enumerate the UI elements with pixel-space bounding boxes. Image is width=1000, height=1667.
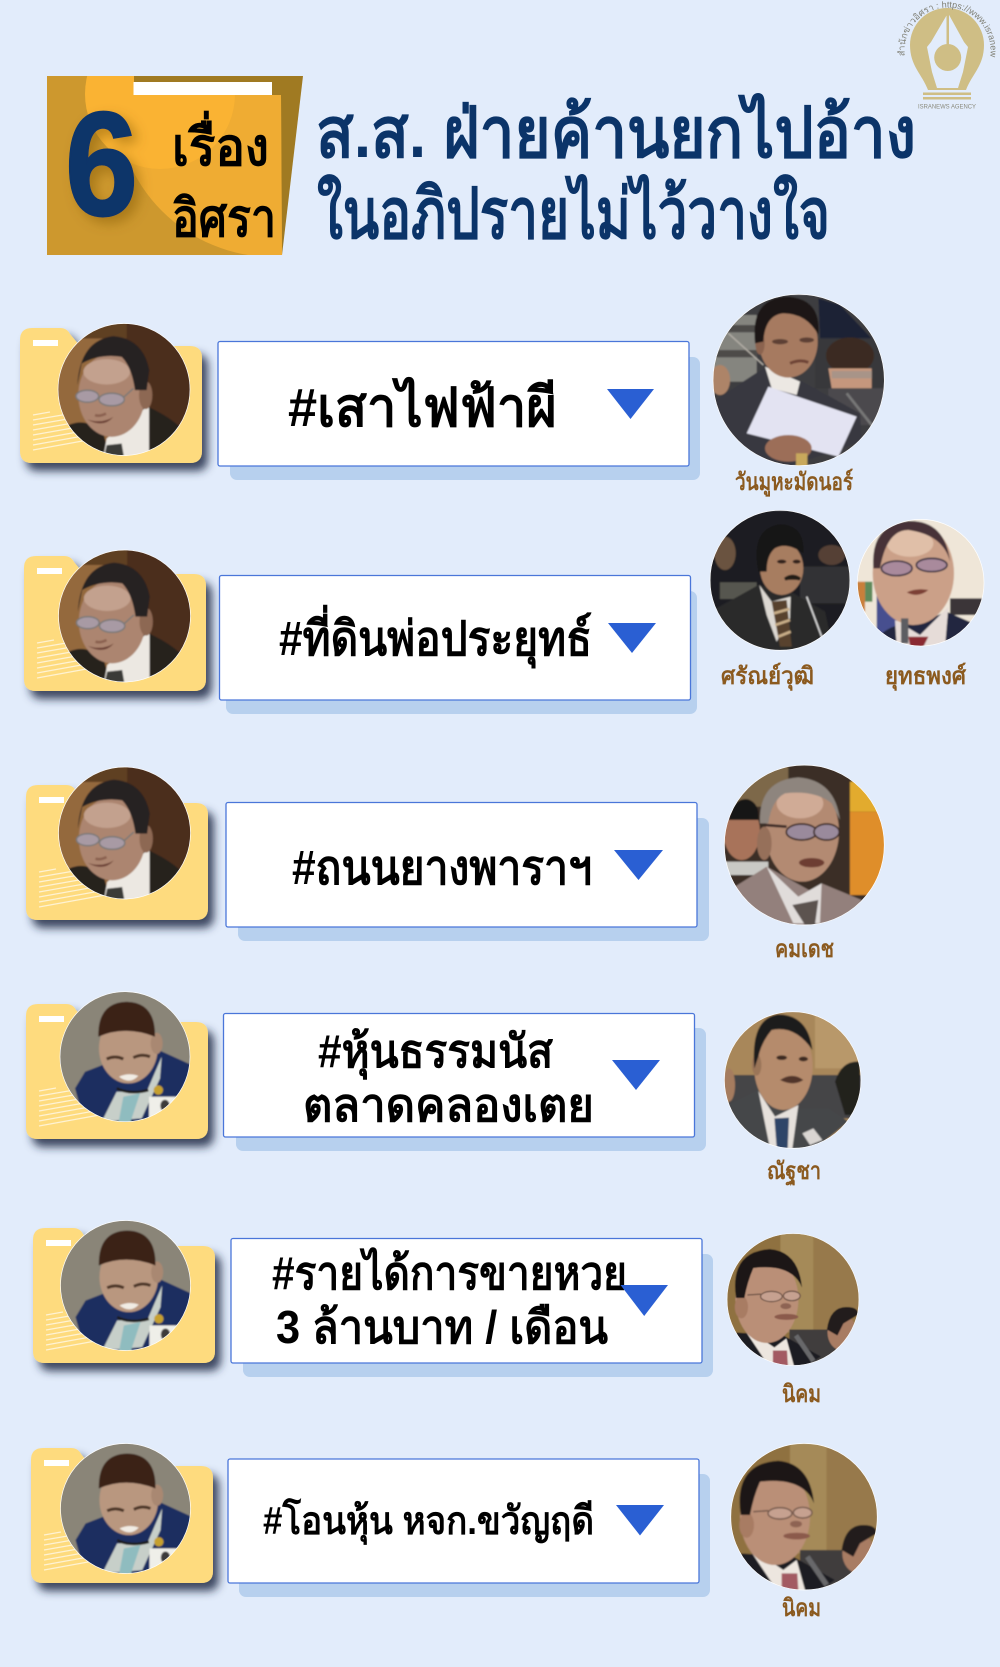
arrow	[616, 1505, 664, 1536]
folder with portrait	[26, 990, 208, 1139]
topic card: #รายได้การขายหวย	[272, 1247, 627, 1299]
topic card: 3 ล้านบาท / เดือน	[276, 1301, 609, 1353]
speaker name: นิคม	[782, 1381, 821, 1408]
title	[316, 92, 916, 253]
speaker name: วันมูหะมัดนอร์	[735, 468, 853, 497]
speaker portrait	[727, 1234, 859, 1366]
row 6: โอนหุ้น หจก.ขวัญฤดี	[31, 1442, 877, 1622]
speaker name: คมเดช	[775, 936, 834, 963]
logo: Isranews Agency	[897, 1, 996, 110]
arrow	[612, 1060, 660, 1090]
speaker name 1: ศรัณย์วุฒิ	[721, 662, 814, 692]
topic card	[228, 1459, 710, 1597]
badge number 6: 6	[65, 82, 138, 247]
topic card: #หุ้นธรรมนัส	[318, 1025, 554, 1080]
topic card: #โอนหุ้น หจก.ขวัญฤดี	[263, 1498, 594, 1545]
speaker portrait	[723, 1012, 861, 1148]
speaker portrait 2	[857, 518, 985, 647]
folder with portrait	[20, 322, 202, 463]
row 3: ถนนยางพาราฯ	[26, 765, 885, 963]
badge label: อิศรา: อิศรา	[172, 190, 276, 248]
speaker name: นิคม	[782, 1595, 821, 1622]
header folder badge	[47, 76, 303, 255]
folder with portrait	[31, 1442, 213, 1583]
row 4: หุ้นธรรมนัส ตลาดคลองเตย	[26, 990, 861, 1187]
speaker portrait	[723, 765, 885, 925]
arrow	[620, 1285, 668, 1316]
topic card: #ที่ดินพ่อประยุทธ์	[279, 604, 592, 669]
arrow	[608, 623, 656, 653]
title: ในอภิปรายไม่ไว้วางใจ	[317, 173, 830, 253]
topic card	[231, 1238, 713, 1377]
speaker name 2: ยุทธพงศ์	[885, 662, 967, 692]
topic card	[224, 1014, 706, 1151]
topic card: #เสาไฟฟ้าผี	[288, 376, 557, 438]
arrow	[614, 850, 663, 880]
speaker portrait	[731, 1443, 877, 1590]
row 2: ที่ดินพ่อประยุทธ์	[24, 510, 985, 714]
speaker portrait	[710, 294, 885, 467]
topic card	[226, 802, 709, 941]
folder with portrait	[24, 548, 206, 691]
folder with portrait	[26, 765, 208, 920]
folder with portrait	[33, 1219, 215, 1363]
badge label: เรื่อง: เรื่อง	[172, 111, 269, 177]
arrow	[607, 389, 654, 419]
speaker portrait 1	[710, 510, 850, 650]
topic card: #ถนนยางพาราฯ	[292, 842, 592, 895]
row 1: เสาไฟฟ้าผี	[20, 294, 885, 497]
topic card	[220, 576, 697, 714]
speaker name: ณัฐชา	[767, 1158, 821, 1187]
topic card	[218, 342, 700, 480]
title: ส.ส. ฝ่ายค้านยกไปอ้าง	[316, 92, 916, 172]
logo: Isranews Agency: ISRANEWS AGENCY	[918, 104, 977, 110]
topic card: ตลาดคลองเตย	[303, 1079, 594, 1131]
row 5: รายได้การขายหวย 3 ล้านบาท / เดือน	[33, 1219, 859, 1408]
